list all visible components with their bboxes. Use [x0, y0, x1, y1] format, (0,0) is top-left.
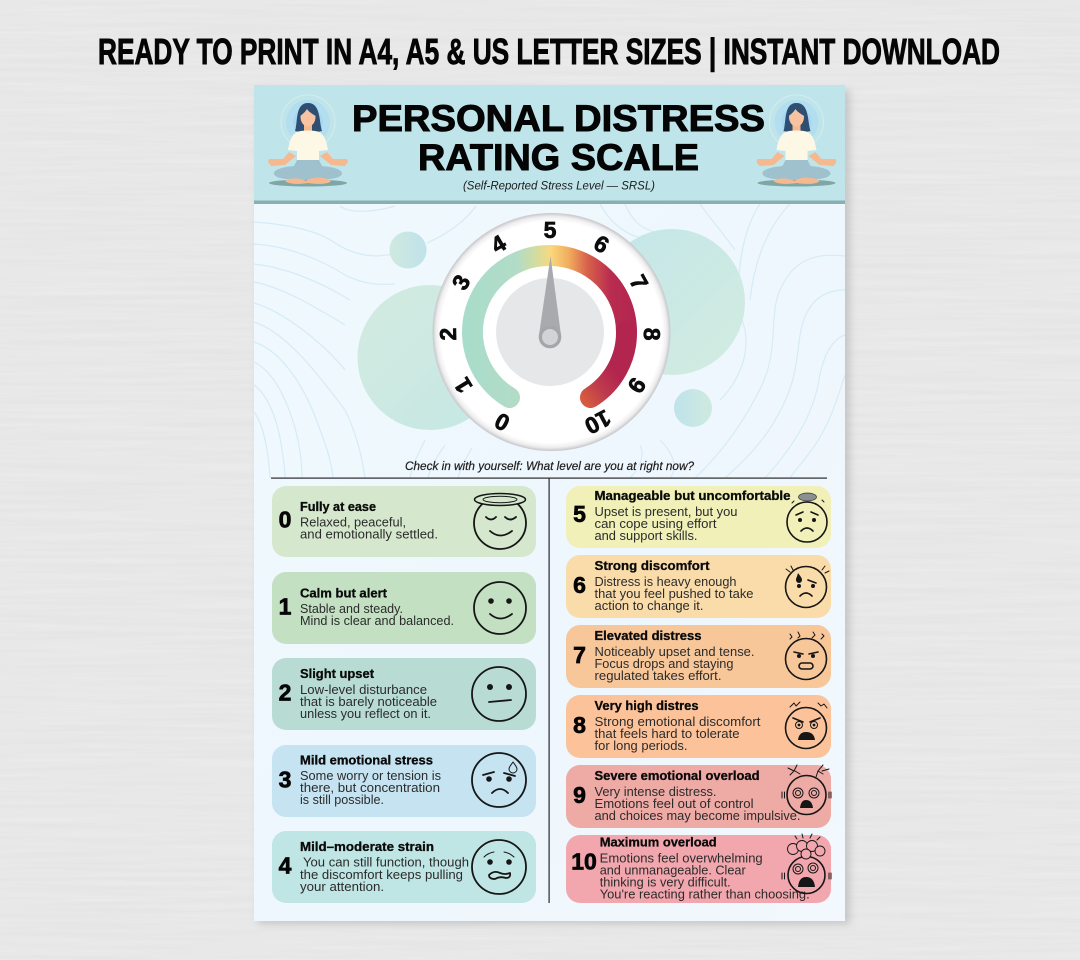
- background contour lines and circles: [254, 204, 845, 478]
- card: level 9: and choices may become impulsive.: [594, 808, 800, 823]
- card: level 4: [272, 831, 536, 903]
- column dividers: [271, 478, 827, 903]
- card: level 4: You can still function, though: [303, 855, 469, 870]
- icon: meditating woman left: [268, 95, 348, 186]
- gauge numbers: 4: [486, 229, 511, 258]
- card: level 5: Manageable but uncomfortable: [594, 488, 790, 503]
- card: level 10: [566, 834, 831, 903]
- card: level 2: [272, 658, 536, 730]
- card: level 3: 3: [279, 766, 291, 792]
- title: [352, 98, 765, 178]
- card: level 8: that feels hard to tolerate: [594, 726, 740, 741]
- subtitle: (Self-Reported Stress Level — SRSL): [463, 180, 655, 192]
- header background: [254, 85, 845, 201]
- card: level 2: Low-level disturbance: [300, 682, 427, 697]
- poster paper: [254, 85, 850, 924]
- card: level 8: Very high distres: [594, 698, 698, 713]
- card: level 8: [566, 695, 831, 758]
- gauge dial: [432, 213, 670, 451]
- card: level 0: and emotionally settled.: [300, 526, 438, 542]
- card: level 1: Mind is clear and balanced.: [300, 613, 454, 628]
- dial face: [432, 213, 670, 451]
- card: level 3: is still possible.: [300, 792, 384, 807]
- icon: neutral face: [472, 667, 526, 721]
- decorative circles: [358, 285, 470, 430]
- icon: tense face: [786, 632, 826, 680]
- header bottom band: [254, 200, 845, 204]
- icon: grimacing strained face: [472, 840, 526, 894]
- icon: halo face: [474, 494, 526, 549]
- card: level 9: 9: [573, 782, 586, 808]
- card: level 2: Slight upset: [300, 666, 375, 681]
- gauge numbers: 8: [639, 327, 665, 341]
- card: level 2: unless you reflect on it.: [300, 706, 431, 721]
- card: level 5: Upset is present, but you: [594, 504, 738, 519]
- card: level 3: Some worry or tension is: [300, 768, 441, 783]
- card: level 10: Maximum overload: [600, 835, 717, 850]
- card: level 2: that is barely noticeable: [300, 694, 437, 709]
- gauge numbers: 10: [580, 405, 615, 440]
- gauge numbers: 2: [435, 327, 461, 341]
- card: level 4: the discomfort keeps pulling: [300, 867, 463, 882]
- title: RATING SCALE: [418, 137, 699, 178]
- card: level 7: 7: [573, 642, 586, 668]
- card: level 0: [272, 486, 536, 557]
- icon: stressed sweating face: [786, 566, 829, 608]
- explosion cloud: [788, 840, 825, 859]
- card: level 6: action to change it.: [594, 598, 704, 613]
- card: level 10: Emotions feel overwhelming: [600, 851, 763, 866]
- gauge numbers: 0: [490, 408, 514, 437]
- card: level 3: Mild emotional stress: [300, 753, 433, 768]
- gauge numbers: 1: [449, 373, 478, 398]
- card: level 6: [566, 555, 831, 618]
- card: level 7: Focus drops and staying: [594, 656, 734, 671]
- card: level 6: Distress is heavy enough: [594, 574, 736, 589]
- card: level 4: 4: [279, 852, 292, 878]
- gauge numbers: 3: [446, 270, 475, 294]
- card: level 4: your attention.: [300, 879, 384, 894]
- panel: header: [254, 85, 845, 204]
- prompt caption: Check in with yourself: What level are you at right now?: [405, 459, 694, 473]
- card: level 10: and unmanageable. Clear: [600, 863, 746, 878]
- card: level 5: [566, 486, 831, 548]
- card: level 4: Mild–moderate strain: [300, 839, 434, 854]
- card: level 9: Emotions feel out of control: [594, 796, 754, 811]
- card: level 8: for long periods.: [594, 738, 688, 753]
- icon: smiling face: [474, 582, 526, 634]
- card: level 5: and support skills.: [594, 528, 698, 543]
- card: level 7: Elevated distress: [594, 628, 702, 643]
- gauge numbers: 6: [590, 230, 614, 258]
- card: level 7: [566, 625, 831, 688]
- gauge numbers: [435, 217, 665, 440]
- card: level 1: Stable and steady.: [300, 601, 403, 616]
- card: level 6: Strong discomfort: [594, 558, 710, 573]
- gauge numbers: 5: [544, 217, 557, 243]
- card: level 1: 1: [279, 594, 292, 620]
- card: level 0: Fully at ease: [300, 499, 376, 514]
- title: PERSONAL DISTRESS: [352, 98, 765, 139]
- gauge numbers: 7: [625, 270, 654, 294]
- card: level 7: Noticeably upset and tense.: [594, 644, 754, 659]
- gauge coloured arc: [473, 255, 627, 398]
- card: level 5: can cope using effort: [594, 516, 717, 531]
- card: level 10: thinking is very difficult.: [600, 875, 731, 890]
- card: level 10: 10: [571, 848, 597, 874]
- card: level 3: there, but concentration: [300, 780, 440, 795]
- gauge inner disc: [496, 278, 604, 386]
- card: level 7: regulated takes effort.: [594, 668, 722, 683]
- card: level 8: 8: [573, 712, 586, 738]
- card: level 6: that you feel pushed to take: [594, 586, 754, 601]
- card: level 9: Severe emotional overload: [594, 768, 760, 783]
- card: level 9: Very intense distress.: [594, 784, 716, 799]
- card: level 0: 0: [279, 506, 291, 532]
- card: level 8: Strong emotional discomfort: [594, 714, 761, 729]
- icon: exploding head face: [782, 834, 831, 894]
- icon: cloudy sad face: [787, 493, 827, 542]
- card: level 5: 5: [573, 501, 586, 527]
- card: level 1: Calm but alert: [300, 586, 388, 600]
- card: level 10: You're reacting rather than choosing.: [600, 887, 810, 902]
- icon: sweating worried face: [472, 753, 526, 807]
- card: level 6: 6: [573, 572, 586, 598]
- needle: [539, 256, 561, 348]
- icon: dizzy overloaded face: [782, 765, 831, 814]
- card: level 0: Relaxed, peaceful,: [300, 514, 406, 530]
- gauge numbers: 9: [622, 373, 651, 398]
- icon: angry shouting face: [786, 702, 827, 748]
- card: level 2: 2: [279, 680, 291, 706]
- card: level 3: [272, 745, 536, 817]
- card: level 1: [272, 572, 536, 644]
- card: level 9: [566, 765, 831, 828]
- icon: meditating woman right: [756, 95, 836, 186]
